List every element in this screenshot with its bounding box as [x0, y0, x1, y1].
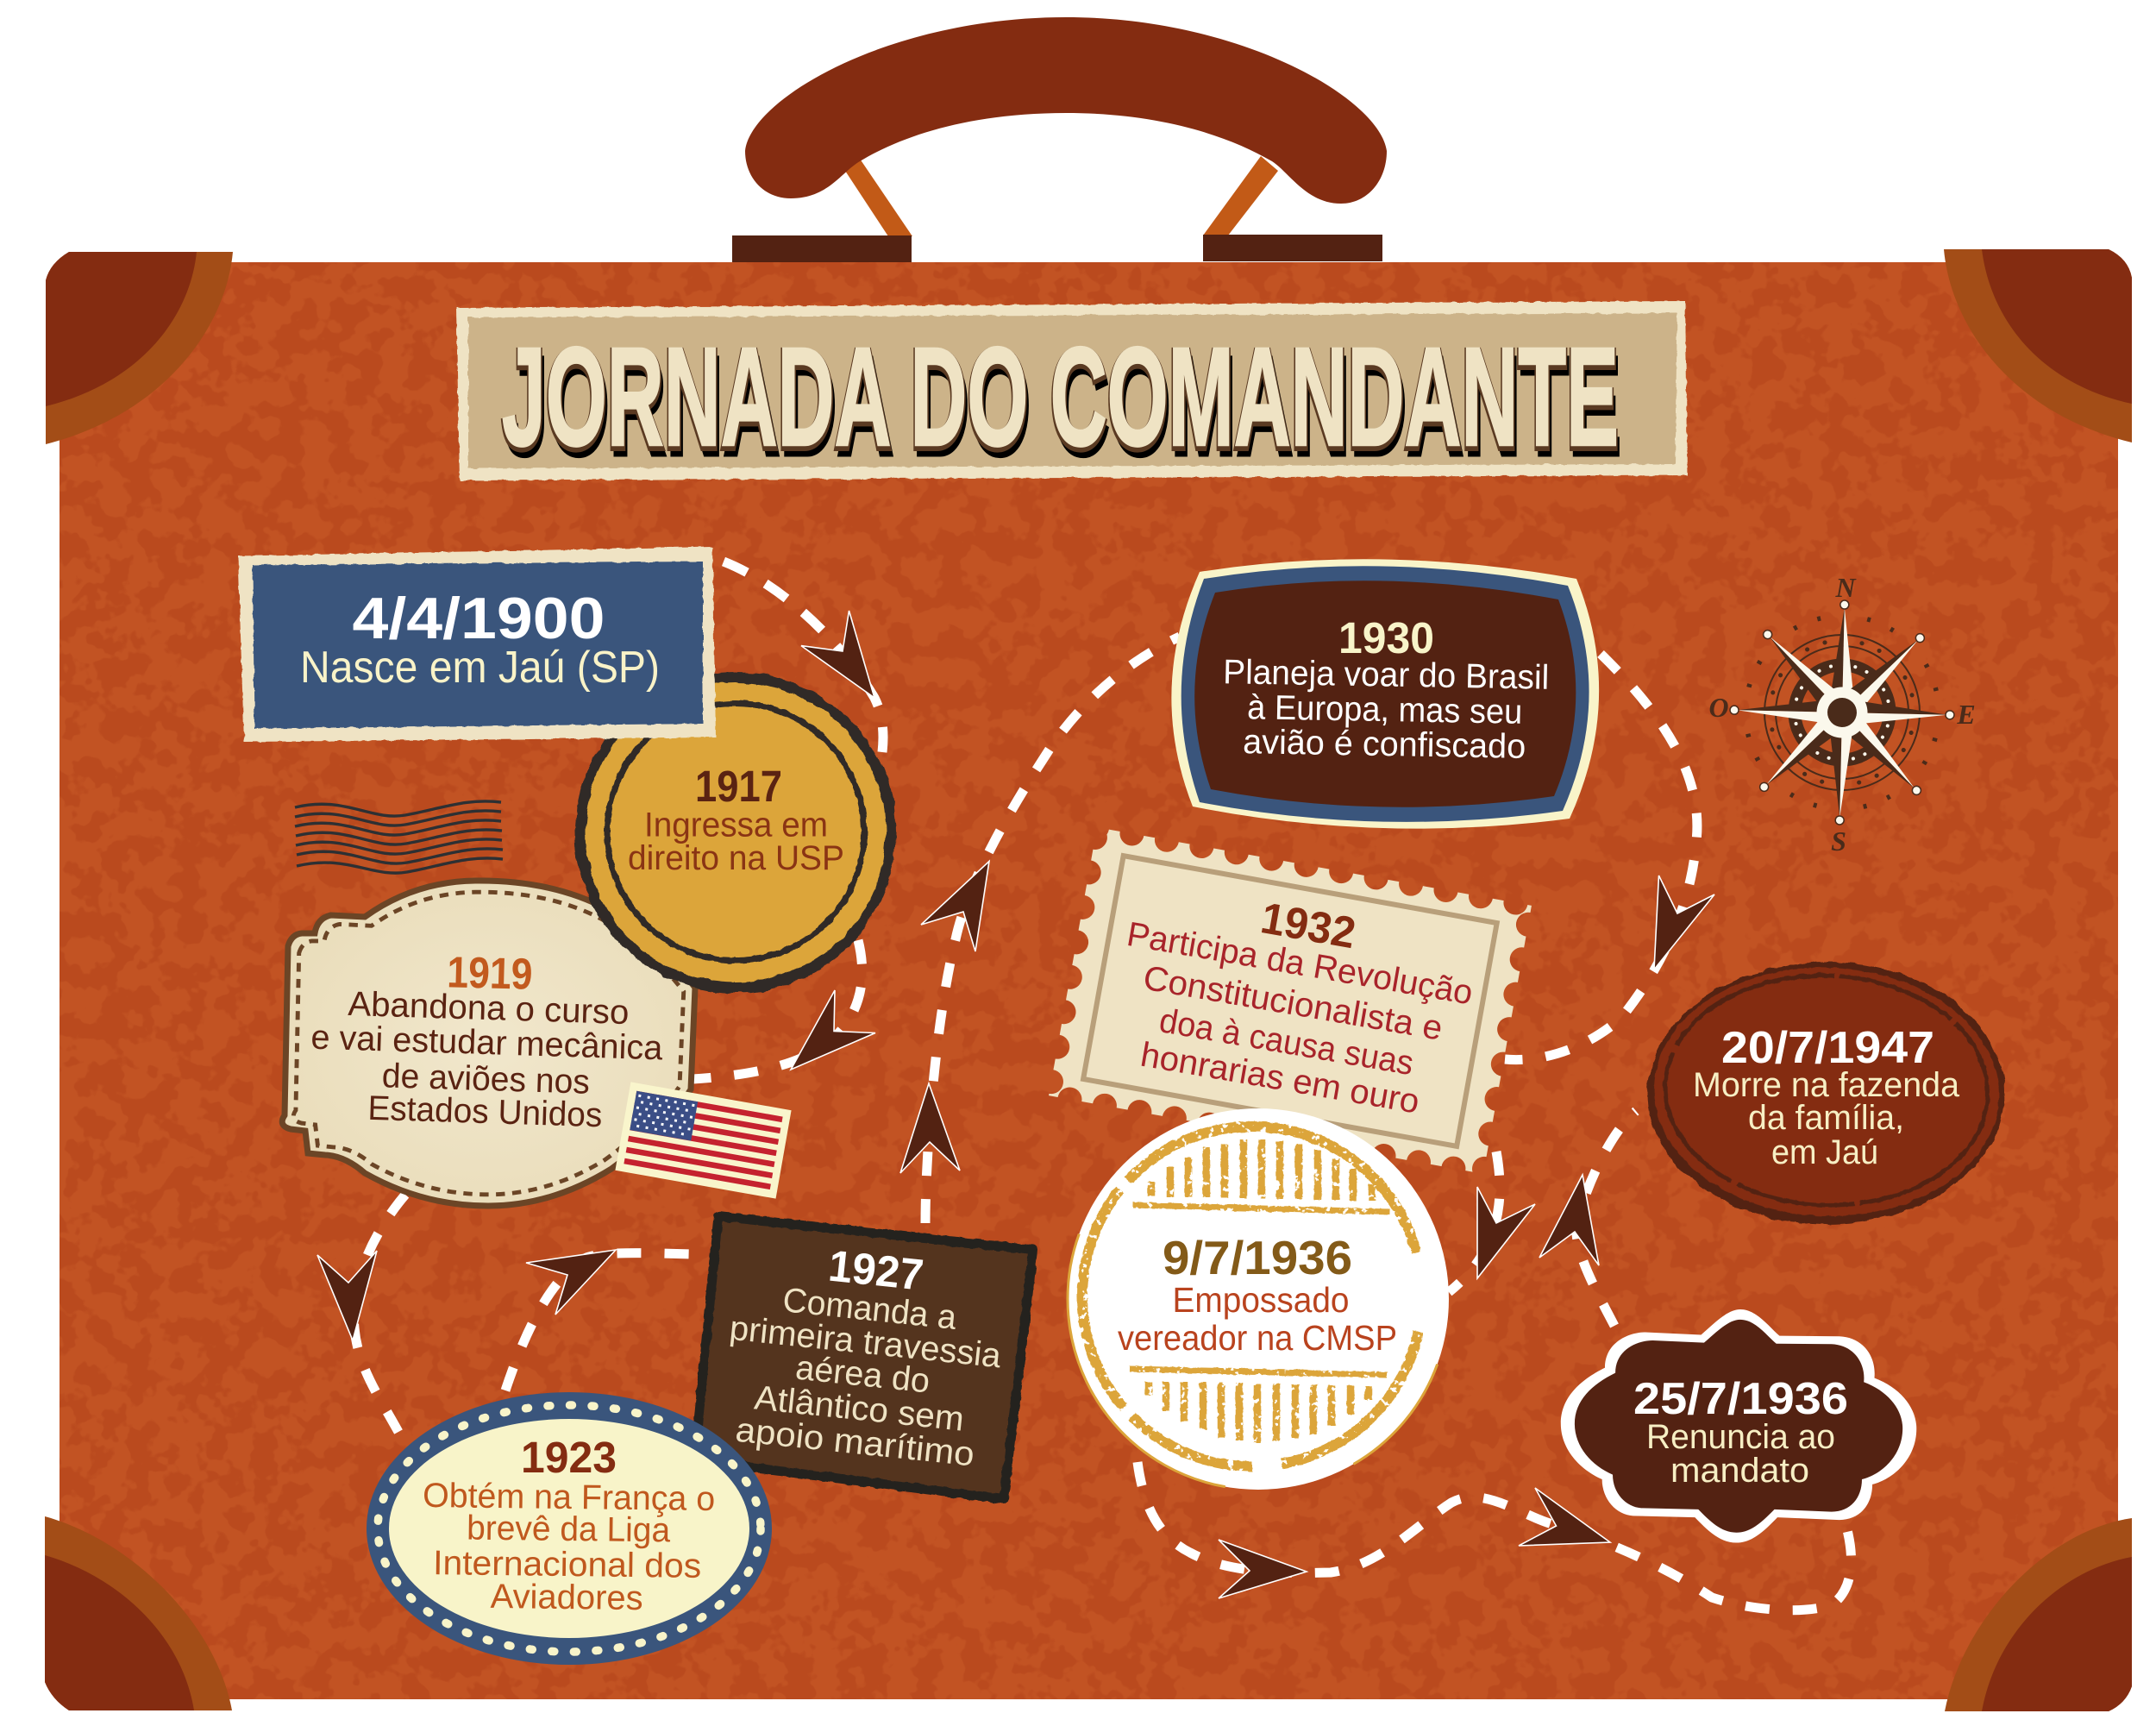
panel: birth 4/4/1900: [238, 547, 716, 742]
text 9/7/1936: [1118, 1280, 1397, 1358]
text 9/7/1936: Empossado: [1173, 1280, 1349, 1320]
title: [502, 317, 1621, 485]
arrow: second, along the bottom route: [1519, 1488, 1610, 1546]
year 1930: 1930: [1338, 613, 1434, 662]
suitcase body: [60, 262, 2118, 1699]
route: 1919 to 1923: [354, 1195, 405, 1432]
date 20/7/1947: 20/7/1947: [1721, 1023, 1934, 1073]
year 1927: 1927: [826, 1241, 926, 1300]
text 25/7/1936: mandato: [1670, 1452, 1809, 1490]
panel: 1927: [694, 1216, 1033, 1499]
icon: compass rose: [1727, 598, 1957, 827]
corner: top right: [1944, 249, 2132, 442]
text 25/7/1936: Renuncia ao: [1646, 1418, 1835, 1456]
arrow: towards 9/7/1936: [1477, 1187, 1535, 1278]
text 1932: doa à causa suas: [1156, 1001, 1416, 1083]
text 1919: Estados Unidos: [367, 1089, 603, 1134]
icon: american flag: [615, 1082, 792, 1199]
route: 1927 to 1930: [925, 637, 1180, 1223]
text 25/7/1936: [1646, 1418, 1835, 1490]
compass letters: E: [1956, 699, 1976, 730]
text 1932: Participa da Revolução: [1124, 915, 1476, 1012]
postmark wavy lines: [295, 801, 503, 873]
panel: 1930: [1171, 559, 1599, 829]
text 1930: à Europa, mas seu: [1247, 688, 1523, 731]
panel: 1919: [282, 881, 695, 1206]
compass letters: [1708, 572, 1976, 857]
arrow: towards 1923: [317, 1251, 377, 1340]
route: 1930 to 1932: [1505, 654, 1697, 1060]
year 1932: 1932: [1257, 893, 1359, 957]
arrow: towards 1919: [791, 990, 875, 1070]
text 1932: honrarias em ouro: [1138, 1036, 1422, 1121]
route: 1932 to 9/7/1936: [1449, 1152, 1500, 1292]
route: 1923 to 1927: [505, 1253, 694, 1390]
arrow: lower, towards 1930: [900, 1083, 960, 1173]
text 1919: de aviões nos: [381, 1057, 591, 1102]
compass letters: N: [1834, 572, 1857, 603]
text 1917: Ingressa em: [644, 806, 828, 844]
panel: 20/7/1947: [1647, 962, 2004, 1225]
arrow: towards 20/7/1947: [1539, 1175, 1599, 1265]
arrow: towards 1917: [801, 611, 874, 698]
compass letters: S: [1831, 825, 1846, 857]
text 1917: [628, 806, 844, 877]
text 1917: direito na USP: [628, 839, 844, 877]
text 1919: Abandona o curso: [348, 985, 630, 1032]
text 1927: Comanda a: [781, 1281, 959, 1337]
text 20/7/1947: em Jaú: [1771, 1133, 1878, 1171]
text 1923: brevê da Liga: [467, 1509, 671, 1549]
panel: 1932 stamp: [1049, 827, 1532, 1174]
text 20/7/1947: Morre na fazenda: [1693, 1066, 1960, 1104]
title plaque: [456, 301, 1688, 485]
arrow: towards 1932: [1654, 876, 1714, 970]
arrow: upper, towards 1930: [921, 861, 989, 951]
text 1923: Aviadores: [490, 1578, 643, 1617]
panel: 9/7/1936 stamp: [1068, 1108, 1449, 1490]
text 1927: primeira travessia: [728, 1309, 1004, 1376]
route: 25/7/1936 to 20/7/1947: [1576, 1111, 1636, 1326]
text birth: Nasce em Jaú (SP): [300, 643, 660, 693]
route: 9/7/1936 to 25/7/1936: [1138, 1462, 1852, 1610]
year 1917: 1917: [695, 762, 782, 811]
text 1927: [728, 1281, 1004, 1473]
text 1923: Internacional dos: [433, 1544, 701, 1585]
text 1930: [1223, 653, 1550, 766]
panel: 25/7/1936: [1561, 1309, 1916, 1543]
text 1930: avião é confiscado: [1243, 723, 1526, 766]
text 1932: [1124, 915, 1476, 1121]
panel: 1917: [580, 677, 891, 988]
text 1927: aérea do: [793, 1349, 931, 1401]
arrow: first, along the bottom route: [1219, 1540, 1307, 1598]
suitcase handle: [732, 17, 1387, 262]
compass letters: O: [1708, 692, 1729, 723]
text 20/7/1947: da família,: [1748, 1099, 1904, 1137]
text 1923: Obtém na França o: [423, 1477, 715, 1518]
text 1927: Atlântico sem: [753, 1378, 966, 1439]
year 1919: 1919: [447, 947, 533, 999]
panel: 1923: [367, 1392, 772, 1665]
date 4/4/1900: 4/4/1900: [352, 586, 605, 651]
date 9/7/1936: 9/7/1936: [1163, 1231, 1352, 1284]
route: birth to 1917: [724, 562, 883, 752]
text 1927: apoio marítimo: [734, 1411, 976, 1473]
corner: bottom left: [45, 1516, 232, 1710]
corner: bottom right: [1945, 1518, 2132, 1711]
text 1919: [310, 985, 664, 1134]
route: 1917 to 1919: [693, 940, 862, 1079]
corner: top left: [46, 252, 233, 444]
text 1932: Constitucionalista e: [1141, 959, 1445, 1048]
text 1919: e vai estudar mecânica: [310, 1019, 664, 1067]
year 1923: 1923: [521, 1433, 617, 1482]
text 1930: Planeja voar do Brasil: [1223, 653, 1550, 697]
date 25/7/1936: 25/7/1936: [1633, 1374, 1848, 1424]
arrow: towards 1927: [526, 1250, 616, 1315]
text 20/7/1947: [1693, 1066, 1960, 1171]
text 9/7/1936: vereador na CMSP: [1118, 1318, 1397, 1358]
text 1923: [423, 1477, 715, 1617]
